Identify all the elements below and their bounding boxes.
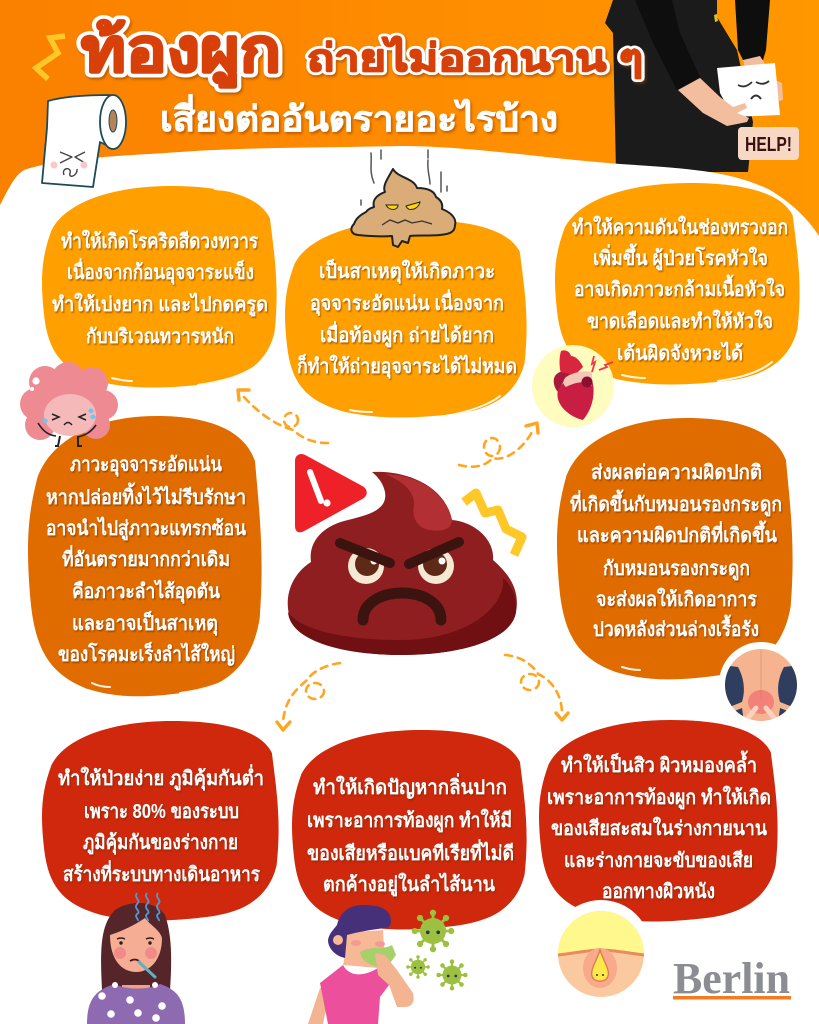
panel: impacted stool <box>285 220 527 418</box>
text block <box>570 462 782 641</box>
text block: เพราะอาการท้องผูก ทำให้เกิด <box>547 785 771 811</box>
icon: sad intestine <box>20 362 118 446</box>
panel: haemorrhoids <box>42 186 277 387</box>
panel: lower back pain <box>557 418 793 679</box>
icon: yellow zigzag squiggle <box>464 493 522 555</box>
text block: เพิ่มขึ้น ผู้ป่วยโรคหัวใจ <box>593 243 768 272</box>
text block <box>58 763 264 886</box>
text block: ทำให้เป็นสิว ผิวหมองคล้ำ <box>561 750 757 777</box>
text block <box>547 750 771 903</box>
text block: อาจนำไปสู่ภาวะแทรกซ้อน <box>46 516 246 542</box>
text block: ภาวะอุจจาระอัดแน่น <box>70 454 222 477</box>
text block: เพราะ 80% ของระบบ <box>84 801 239 823</box>
icon: toilet roll <box>42 95 126 187</box>
text block: ส่งผลต่อความผิดปกติ <box>591 462 762 484</box>
text block: ออกทางผิวหนัง <box>602 881 715 903</box>
panel: bad breath <box>292 730 527 930</box>
text block: ของเสียสะสมในร่างกายนาน <box>551 816 767 840</box>
help sign <box>738 127 799 160</box>
help sign: HELP! <box>745 134 792 156</box>
text block <box>52 229 268 348</box>
text block: กับบริเวณทวารหนัก <box>86 326 234 348</box>
text block: และอาจเป็นสาเหตุ <box>72 610 218 636</box>
text block: และร่างกายจะขับของเสีย <box>564 849 753 872</box>
title <box>36 17 643 139</box>
text block: หากปล่อยทิ้งไว้ไม่รีบรักษา <box>46 482 246 509</box>
text block <box>572 215 788 365</box>
text block: ทำให้เบ่งยาก และไปกดครูด <box>52 292 268 318</box>
illustration: woman with bad breath <box>308 905 414 1024</box>
icon: lower back pain <box>720 642 797 721</box>
panel: acne and dull skin <box>539 720 778 921</box>
text block: และความผิดปกติที่เกิดขึ้น <box>577 520 777 547</box>
icon: warning triangle <box>296 455 366 531</box>
text block: จะส่งผลให้เกิดอาการ <box>596 587 757 611</box>
photo: woman holding toilet paper <box>605 0 799 172</box>
text block <box>46 454 246 666</box>
text block: อาจเกิดภาวะกล้ามเนื้อหัวใจ <box>574 274 785 301</box>
title: second part: ถ่ายไม่ออกนาน ๆ <box>307 36 643 80</box>
text block: ปวดหลังส่วนล่างเรื้อรัง <box>593 614 759 641</box>
text block: ก็ทำให้ถ่ายอุจจาระได้ไม่หมด <box>297 353 517 379</box>
icon: pimple <box>551 900 651 1000</box>
icon: green viruses <box>406 910 468 991</box>
title: second part: ถ่ายไม่ออกนาน ๆ <box>307 36 643 80</box>
text block <box>297 258 517 379</box>
text block: ขาดเลือดและทำให้หัวใจ <box>587 309 773 333</box>
arrow: to low immunity <box>277 663 340 730</box>
panel: chest pressure <box>555 183 800 384</box>
illustration: sick girl with thermometer <box>87 893 185 1024</box>
arrow: to heart <box>459 423 538 467</box>
icon: heart <box>532 345 614 427</box>
text block: สร้างที่ระบบทางเดินอาหาร <box>63 859 260 886</box>
text block: อุจจาระอัดแน่น เนื่องจาก <box>310 288 504 316</box>
icon: yellow zigzag <box>36 36 65 79</box>
arrow: to acne <box>505 655 568 720</box>
icon: smelly poop <box>351 150 455 247</box>
text block: ของเสียหรือแบคทีเรียที่ไม่ดี <box>307 838 514 865</box>
text block: ทำให้เกิดปัญหากลิ่นปาก <box>313 772 507 799</box>
text block: กับหมอนรองกระดูก <box>603 558 750 582</box>
text block: ตกค้างอยู่ในลำไส้นาน <box>323 872 495 898</box>
text block: เต้นผิดจังหวะได้ <box>617 341 743 365</box>
orange header background <box>0 0 819 300</box>
text block: ทำให้ความดันในช่องทรวงอก <box>572 215 788 239</box>
text block: เป็นสาเหตุให้เกิดภาวะ <box>319 258 495 284</box>
text block: ของโรคมะเร็งลำไส้ใหญ่ <box>58 641 235 666</box>
title: main word: ท้องผูก <box>81 17 281 88</box>
text block: ที่อันตรายมากกว่าเดิม <box>62 544 230 571</box>
title: main word: ท้องผูก <box>81 17 281 88</box>
text block: เมื่อท้องผูก ถ่ายได้ยาก <box>320 320 494 349</box>
text block <box>307 772 514 898</box>
panel: low immunity <box>42 721 279 920</box>
eyes <box>348 548 454 584</box>
text block: คือภาวะลำไส้อุดตัน <box>72 579 220 604</box>
text block: ทำให้ป่วยง่าย ภูมิคุ้มกันต่ำ <box>58 763 264 792</box>
arrow: to haemorrhoids <box>238 390 328 443</box>
subtitle: เสี่ยงต่ออันตรายอะไรบ้าง <box>160 94 558 139</box>
text block: ที่เกิดขึ้นกับหมอนรองกระดูก <box>570 489 782 518</box>
text block: ภูมิคุ้มกันของร่างกาย <box>83 831 238 856</box>
panel: complications <box>28 416 262 696</box>
icon: angry poop <box>288 472 517 655</box>
text block: เพราะอาการท้องผูก ทำให้มี <box>307 808 512 834</box>
text block: เนื่องจากก้อนอุจจาระแข็ง <box>67 257 254 285</box>
toilet paper with sad face <box>717 56 783 117</box>
logo: Berlin: Berlin <box>673 954 790 1003</box>
text block: ทำให้เกิดโรคริดสีดวงทวาร <box>61 229 258 253</box>
